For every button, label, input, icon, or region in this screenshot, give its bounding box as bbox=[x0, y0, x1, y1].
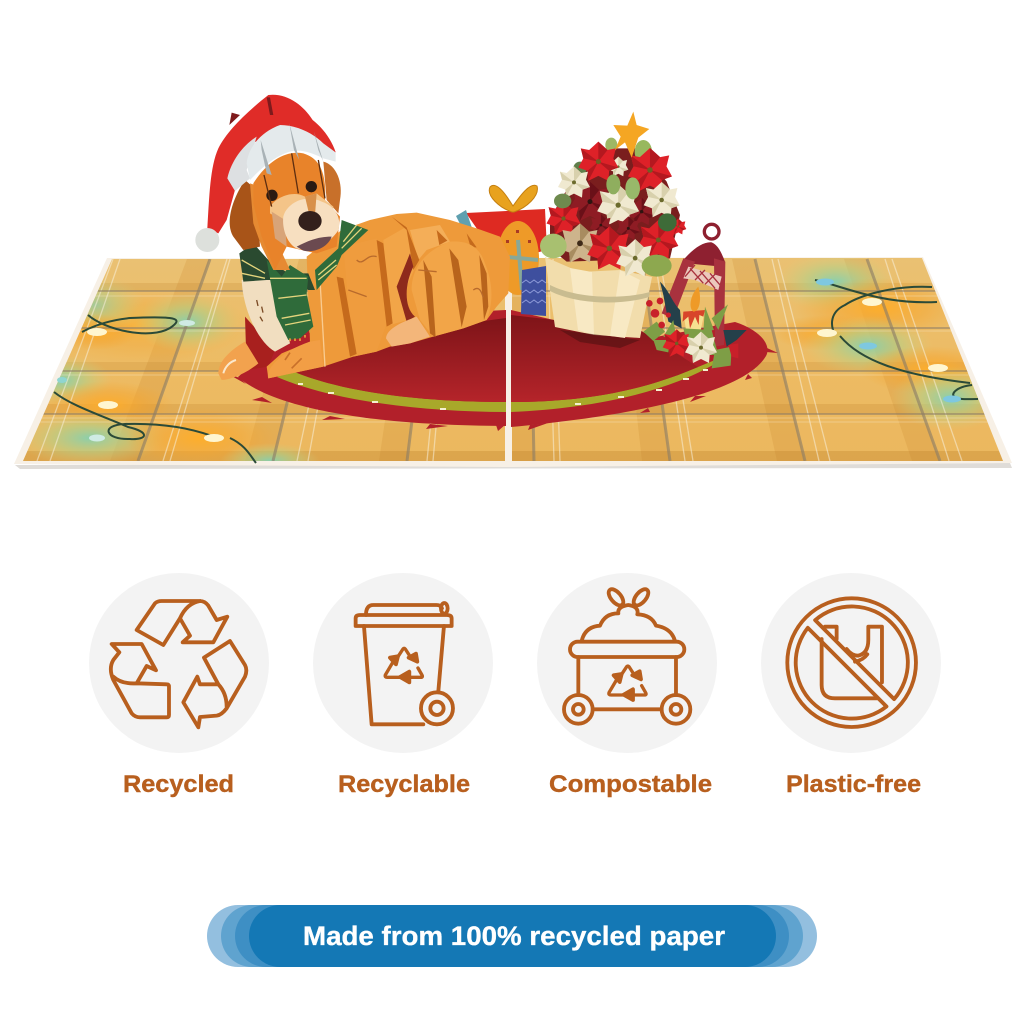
panel: recycled bbox=[89, 573, 269, 798]
dog: muzzle bbox=[283, 199, 339, 250]
icon: wheelie bin bbox=[356, 603, 453, 724]
lantern: flowers bbox=[663, 329, 691, 357]
panel: plastic-free bbox=[761, 573, 941, 798]
rug fringe bbox=[228, 348, 778, 431]
dog: cheeks bbox=[270, 193, 333, 223]
dog: eyes bbox=[266, 190, 278, 201]
rug inner bbox=[290, 318, 506, 402]
tree: front leaves bbox=[540, 174, 677, 277]
icon: recycling arrows bbox=[111, 601, 246, 727]
dog: left paw bbox=[218, 342, 258, 380]
dog: blaze bbox=[305, 193, 317, 215]
banner bbox=[207, 905, 817, 967]
banner text: Made from 100% recycled paper bbox=[303, 921, 726, 951]
hat back brim bbox=[227, 137, 257, 191]
hat slits bbox=[261, 123, 323, 175]
pompom bbox=[195, 228, 219, 252]
dog: nose bbox=[298, 211, 322, 231]
icon: no plastic bag bbox=[787, 598, 916, 727]
dog body bbox=[218, 213, 510, 380]
dog: chest bbox=[242, 280, 290, 352]
dog: long ear hair bbox=[250, 183, 290, 270]
light glows bbox=[31, 258, 984, 461]
dog: face bbox=[253, 153, 340, 270]
pop-up card scene bbox=[0, 95, 1024, 479]
gift boxes and ornament bbox=[456, 185, 547, 316]
dog: right ear bbox=[323, 162, 341, 213]
gold ring bbox=[277, 370, 506, 412]
hat front brim bbox=[247, 125, 336, 180]
label: recycled: Recycled bbox=[123, 771, 234, 798]
left string lights bbox=[54, 315, 256, 463]
lantern: lattice bbox=[683, 267, 722, 290]
lantern: frame bbox=[662, 258, 725, 347]
dog head and hat bbox=[195, 95, 341, 270]
icon circle: recyclable bbox=[313, 573, 493, 753]
hat front red bbox=[257, 118, 336, 152]
tree: flowers bbox=[546, 142, 686, 276]
dog: scarf bbox=[239, 220, 368, 341]
dog: side flap bbox=[272, 212, 287, 247]
poinsettia tree bbox=[540, 112, 686, 277]
right string lights bbox=[815, 278, 978, 402]
lantern: flame bbox=[691, 287, 700, 312]
star bbox=[613, 112, 649, 158]
lantern bbox=[643, 224, 747, 368]
lantern: greens bbox=[643, 304, 732, 368]
lantern: candle bbox=[683, 310, 705, 335]
dog: body bbox=[267, 213, 510, 378]
dog: back ear bbox=[230, 180, 260, 250]
lantern: dark foliage bbox=[660, 282, 747, 347]
santa hat bbox=[207, 95, 336, 233]
dog: slits bbox=[337, 217, 477, 357]
dog: front paw bbox=[268, 340, 323, 378]
dog: face slits bbox=[264, 153, 325, 207]
dog: mouth bbox=[297, 237, 332, 251]
lantern: berries bbox=[646, 298, 671, 328]
card: white paper border bbox=[14, 257, 1012, 467]
dog: shadow leg bbox=[245, 317, 275, 370]
center fold bbox=[506, 290, 511, 467]
card: plaid pattern panels bbox=[23, 258, 1003, 461]
label: plastic-free: Plastic-free bbox=[786, 771, 921, 798]
icon circle: compostable bbox=[537, 573, 717, 753]
panel: compostable bbox=[537, 573, 717, 798]
card shadow bbox=[15, 463, 1012, 469]
dog: back paw bbox=[386, 317, 430, 347]
dog: haunch bbox=[412, 241, 491, 337]
hat dark fold bbox=[229, 97, 273, 125]
tree: leaves bbox=[573, 138, 652, 175]
icon circle: recycled bbox=[89, 573, 269, 753]
icon: compost cart bbox=[564, 587, 690, 724]
label: recyclable: Recyclable bbox=[338, 771, 470, 798]
panel: recyclable bbox=[313, 573, 493, 798]
red rug bbox=[228, 310, 778, 431]
dog: haunch shadow bbox=[397, 253, 415, 322]
dog: hair strip bbox=[278, 277, 297, 342]
icon circle: plastic-free bbox=[761, 573, 941, 753]
basket bbox=[545, 257, 652, 348]
label: compostable: Compostable bbox=[549, 771, 712, 798]
